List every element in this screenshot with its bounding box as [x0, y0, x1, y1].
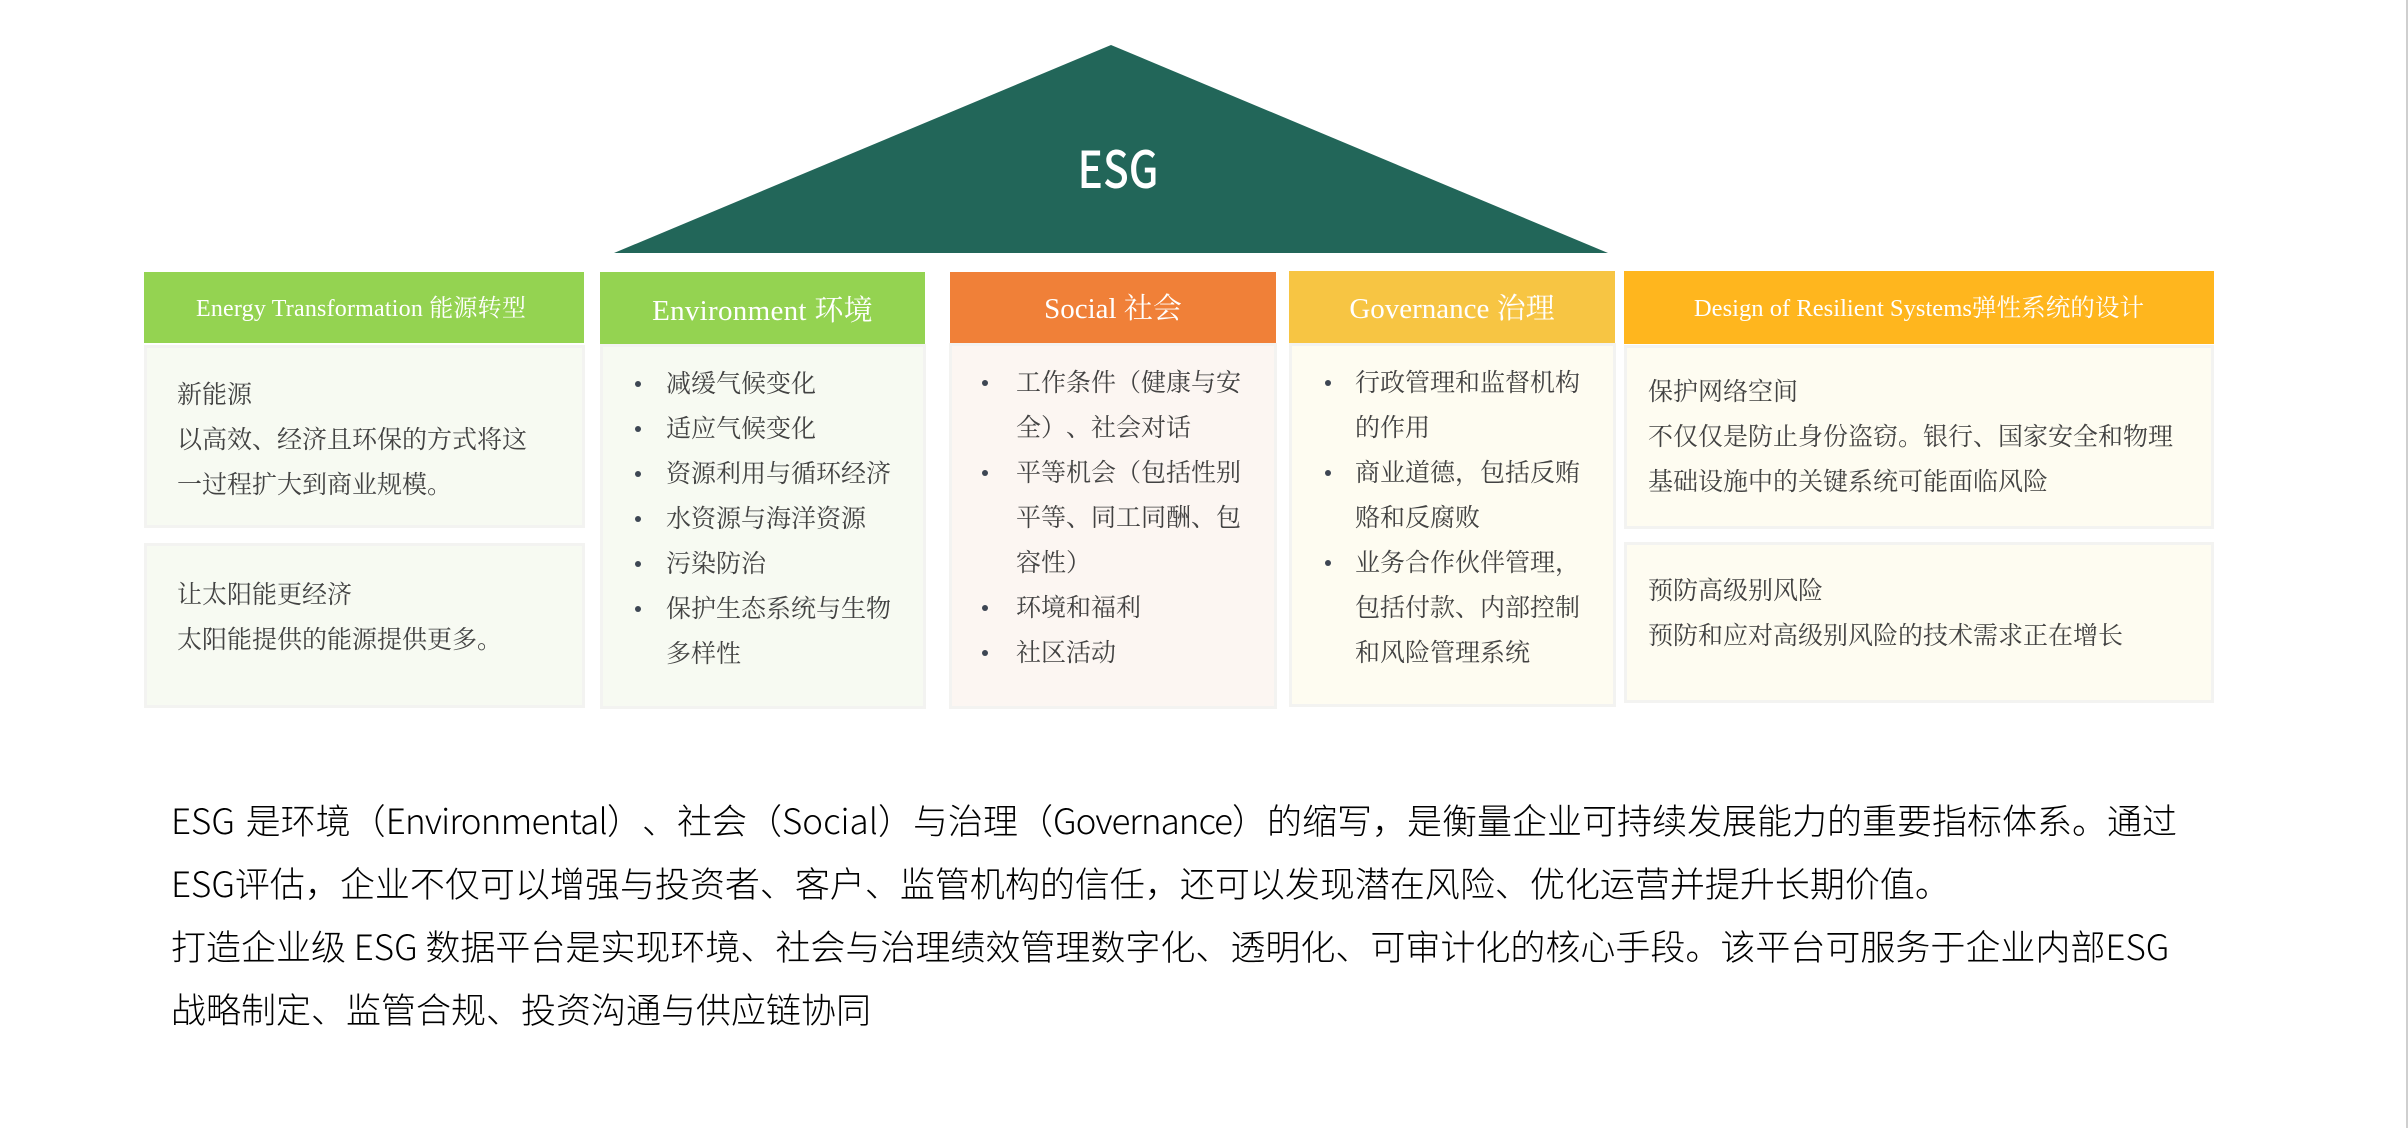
heading: Environment: Environment 环境 [652, 295, 873, 327]
text: new energy: 一过程扩大到商业规模。 [177, 472, 452, 499]
list: governance topics: 业务合作伙伴管理， [1355, 550, 1580, 577]
description paragraph [171, 794, 2177, 1034]
text: new energy: 以高效、经济且环保的方式将这 [177, 427, 527, 454]
heading: Governance [1289, 271, 1615, 343]
card: protect cyberspace [1624, 345, 2214, 529]
list: social topics: 环境和福利 [1016, 595, 1141, 622]
text: cheaper solar: 让太阳能更经济 [177, 582, 352, 609]
text: protect cyberspace: 基础设施中的关键系统可能面临风险 [1648, 469, 2048, 496]
card: governance list [1289, 343, 1616, 707]
list: social topics: 平等机会（包括性别 [1016, 460, 1241, 487]
list: governance topics: 行政管理和监督机构 [1355, 370, 1580, 397]
list: environment topics: 污染防治 [666, 551, 766, 578]
text: protect cyberspace [1648, 378, 2173, 496]
card: cheaper solar [144, 543, 585, 708]
text: high-level risk: 预防高级别风险 [1648, 578, 1823, 605]
list: environment topics: 减缓气候变化 [666, 371, 816, 398]
list: environment topics: 资源利用与循环经济 [666, 461, 891, 488]
card: social list [949, 343, 1277, 709]
card: high-level risk [1624, 542, 2214, 703]
list: social topics: 社区活动 [1016, 640, 1116, 667]
list: governance topics: 包括付款、内部控制 [1355, 595, 1580, 622]
heading: Energy Transformation: Energy Transformation 能源转型 [196, 296, 526, 322]
text: cheaper solar: 太阳能提供的能源提供更多。 [177, 627, 502, 654]
list: governance topics [1325, 370, 1580, 667]
text: high-level risk: 预防和应对高级别风险的技术需求正在增长 [1648, 623, 2123, 650]
list: environment topics [635, 370, 891, 668]
text: cheaper solar [177, 582, 502, 654]
description paragraph: 打造企业级 ESG 数据平台是实现环境、社会与治理绩效管理数字化、透明化、可审计化的核心手段。该平台可服务于企业内部ESG [171, 920, 2169, 971]
page edge line [2406, 0, 2408, 1128]
panel: Energy Transformation [144, 272, 585, 708]
heading: Governance: Governance 治理 [1349, 293, 1555, 325]
list: governance topics: 的作用 [1355, 415, 1430, 442]
description paragraph: ESG评估，企业不仅可以增强与投资者、客户、监管机构的信任，还可以发现潜在风险、优化运营并提升长期价值。 [171, 857, 1950, 908]
description paragraph: 战略制定、监管合规、投资沟通与供应链协同 [171, 983, 871, 1034]
heading: Environment [600, 272, 925, 344]
list: environment topics: 多样性 [666, 641, 741, 668]
panel: Design of Resilient Systems [1624, 271, 2214, 703]
list: governance topics: 赂和反腐败 [1355, 505, 1480, 532]
heading: Energy Transformation [144, 272, 584, 343]
list: social topics: 全）、社会对话 [1016, 415, 1191, 442]
panel: Governance [1289, 271, 1616, 707]
text: high-level risk [1648, 578, 2123, 650]
roof: ESG triangle [614, 45, 1608, 253]
list: environment topics: 适应气候变化 [666, 416, 816, 443]
heading: Design of Resilient Systems [1624, 271, 2214, 344]
heading: Social: Social 社会 [1044, 293, 1182, 325]
heading: Design of Resilient Systems: Design of Resilient Systems弹性系统的设计 [1694, 295, 2144, 322]
description paragraph: ESG 是环境（Environmental）、社会（Social）与治理（Governance）的缩写，是衡量企业可持续发展能力的重要指标体系。通过 [171, 794, 2177, 845]
list: governance topics: 和风险管理系统 [1355, 640, 1530, 667]
panel: Social [949, 272, 1277, 709]
list: environment topics: 水资源与海洋资源 [666, 506, 866, 533]
panel: Environment [600, 272, 926, 709]
text: new energy: 新能源 [177, 382, 252, 409]
list: environment topics: 保护生态系统与生物 [666, 596, 891, 623]
list: social topics [982, 370, 1241, 667]
list: social topics: 容性） [1016, 550, 1091, 577]
text: protect cyberspace: 不仅仅是防止身份盗窃。银行、国家安全和物理 [1648, 424, 2173, 451]
card: environment list [600, 344, 926, 709]
text: new energy [177, 382, 527, 499]
card: new energy [144, 345, 585, 528]
list: social topics: 平等、同工同酬、包 [1016, 505, 1241, 532]
list: social topics: 工作条件（健康与安 [1016, 370, 1241, 397]
list: governance topics: 商业道德，包括反贿 [1355, 460, 1580, 487]
roof: ESG triangle: ESG [1078, 129, 1158, 203]
heading: Social [950, 272, 1276, 343]
text: protect cyberspace: 保护网络空间 [1648, 379, 1798, 406]
